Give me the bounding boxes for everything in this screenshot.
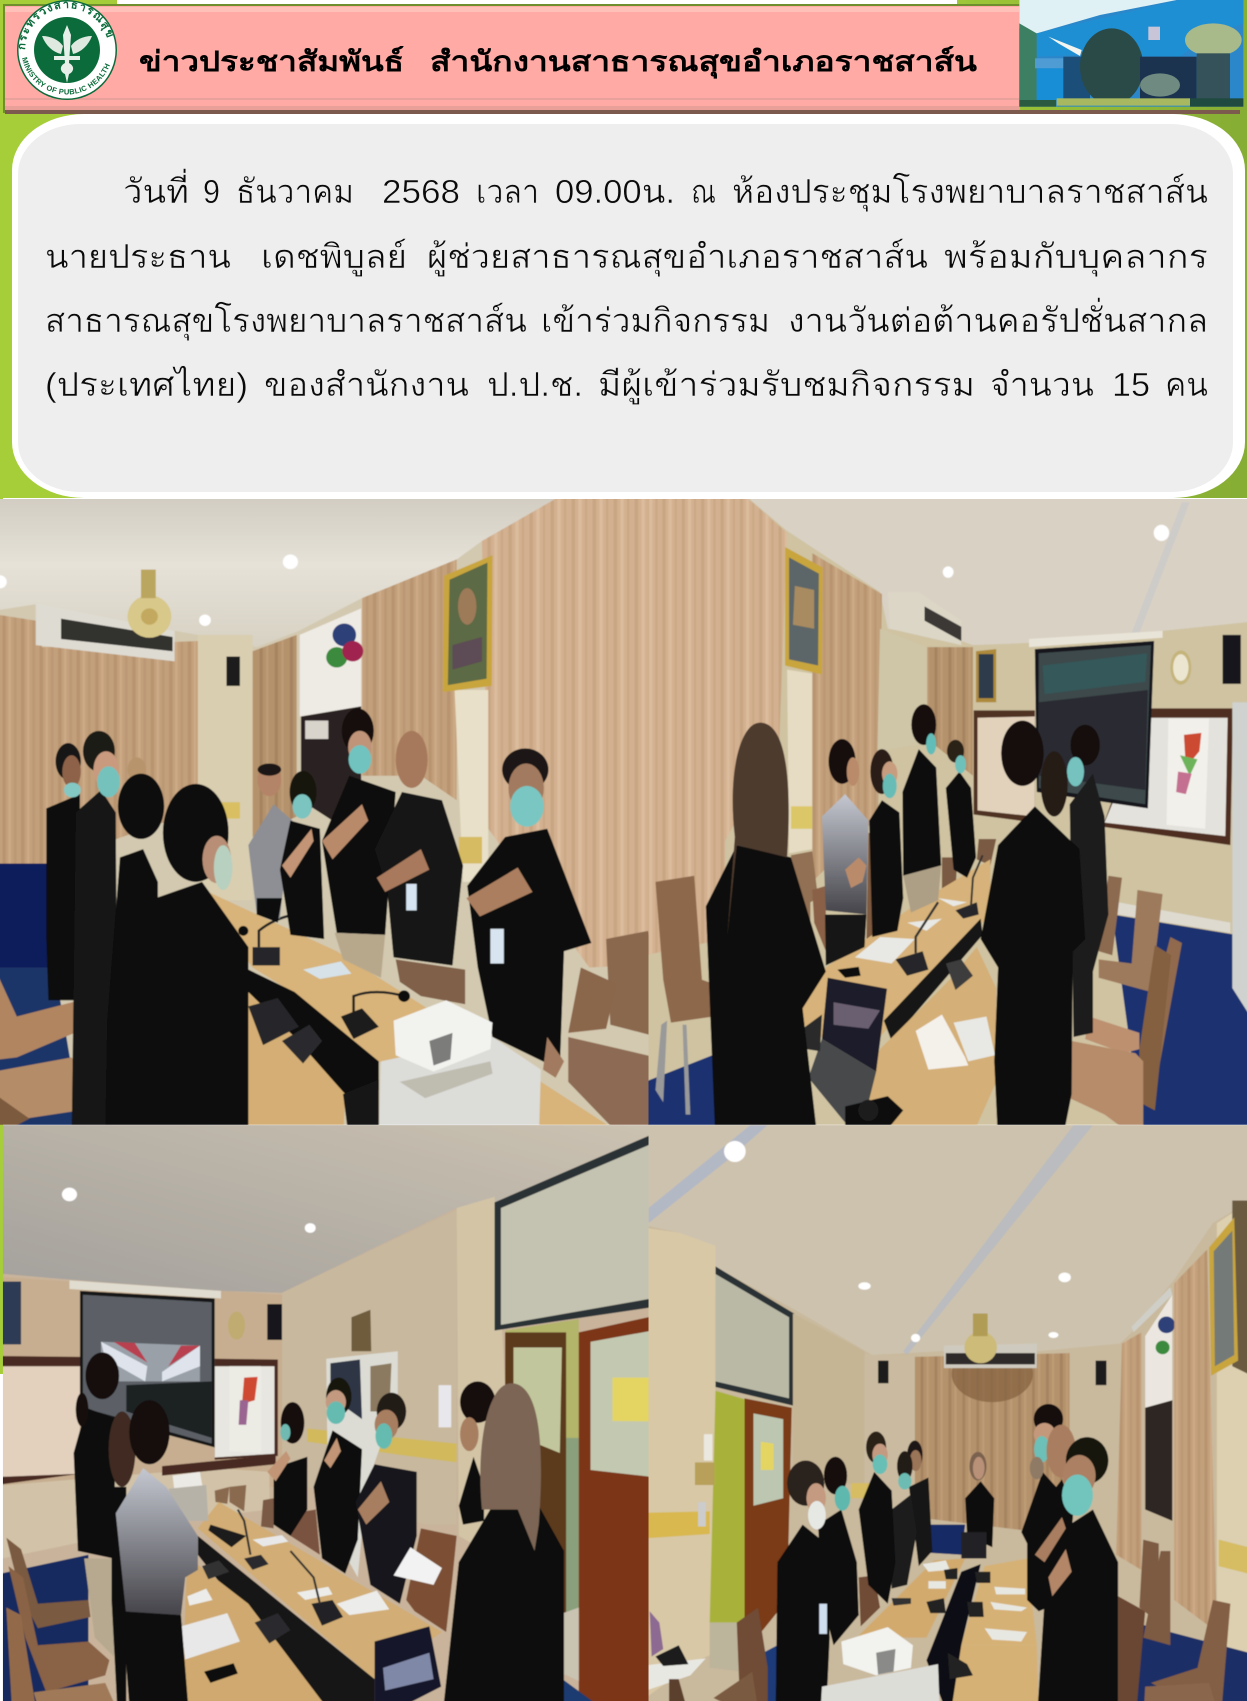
person: woman behind	[109, 1412, 136, 1701]
person: woman in black far	[267, 1402, 307, 1536]
pillar	[625, 1225, 715, 1701]
chairs	[737, 1608, 768, 1701]
chairs left	[6, 1538, 90, 1628]
left chairs	[655, 876, 714, 1023]
floor and blue bench	[930, 1525, 965, 1555]
door area	[710, 1391, 748, 1623]
news text line 4: มีผู้เข้าร่วมรับชมกิจกรรม	[598, 367, 975, 405]
person: woman from back	[105, 774, 164, 1143]
person: woman front	[156, 784, 248, 1143]
projector small	[173, 1472, 203, 1493]
right chairs	[1099, 876, 1122, 955]
window	[495, 1125, 673, 1330]
news text line 4	[45, 365, 1208, 405]
ac unit	[36, 603, 175, 661]
person: man far left	[907, 1441, 932, 1566]
left whiteboard	[0, 1356, 80, 1487]
news text line 1: วันที่	[123, 168, 189, 211]
person: woman far	[965, 1452, 994, 1547]
person: man near door	[459, 1381, 495, 1525]
header title: สำนักงานสาธารณสุขอำเภอราชสาส์น	[430, 46, 977, 79]
laptop far	[961, 1532, 986, 1559]
person: front man with mask	[1037, 1437, 1118, 1701]
person: woman in jacket	[314, 1378, 362, 1574]
table	[209, 892, 608, 1125]
person: man far in black	[946, 740, 976, 878]
boards	[974, 710, 1035, 823]
projector on stand	[342, 1000, 542, 1125]
side table and phone	[625, 1658, 706, 1698]
chairs	[396, 959, 465, 1004]
news text line 1: 2568	[382, 174, 460, 211]
header title	[139, 46, 977, 79]
person: woman back with long hair	[706, 723, 826, 1143]
screen	[69, 1280, 221, 1298]
photo: staff in room, long view	[648, 1125, 1247, 1701]
news text line 2	[45, 238, 1208, 277]
news text line 1: ณ	[691, 174, 716, 211]
far portrait	[976, 649, 996, 702]
photo: staff in room, rear view	[2, 1125, 649, 1701]
person: man far left	[46, 743, 81, 1000]
window	[715, 1266, 794, 1406]
green page background	[0, 0, 1247, 498]
news text line 3: สาธารณสุขโรงพยาบาลราชสาส์น	[45, 301, 527, 341]
icon: ministry of public health logo	[17, 0, 117, 100]
person: man grey shirt	[248, 763, 293, 923]
person: bald man	[375, 731, 463, 966]
walls	[793, 1314, 865, 1487]
person: man in black, back	[74, 1352, 119, 1657]
floor	[0, 1555, 88, 1701]
ac and fan	[944, 1344, 1037, 1368]
person: older man	[892, 1451, 917, 1589]
person: woman with mask	[72, 731, 120, 1143]
table	[198, 1502, 442, 1679]
news text line 2: นายประธาน	[45, 239, 231, 276]
right wall	[282, 1210, 457, 1525]
news text line 3: งานวันต่อต้านคอรัปชั่นสากล	[788, 297, 1208, 340]
portrait	[443, 555, 492, 692]
news text line 2: ผู้ช่วยสาธารณสุขอำเภอราชสาส์น	[427, 238, 928, 277]
photo: staff watching screen, front view	[648, 499, 1247, 1125]
news text line 2: เดชพิบูลย์	[261, 238, 407, 277]
news text line 4: คน	[1165, 367, 1208, 404]
person: man grey shirt, back	[116, 1400, 198, 1701]
doors	[505, 1319, 579, 1619]
person: young man	[322, 708, 396, 978]
news text line 4: (ประเทศไทย)	[45, 365, 248, 404]
person: woman black shirt	[280, 771, 324, 939]
person: bald man right	[1027, 1425, 1076, 1611]
news text line 1: 9	[203, 174, 220, 211]
person: woman with white mask	[775, 1461, 830, 1701]
person: young man right	[1021, 1404, 1063, 1543]
photo: health office building	[1019, 0, 1244, 107]
cabinet	[326, 1351, 398, 1577]
person: woman in jacket	[859, 1432, 895, 1604]
person: man in black back	[981, 721, 1085, 1143]
poster	[300, 608, 361, 717]
map	[229, 1365, 261, 1367]
paper in hand	[394, 1547, 442, 1585]
clock and speaker	[228, 1312, 245, 1340]
news text line 3: เข้าร่วมกิจกรรม	[541, 303, 770, 340]
portrait left	[785, 547, 823, 674]
laptop	[822, 978, 887, 1072]
person: woman with mask 2	[818, 1457, 859, 1645]
person: woman black shirt	[869, 749, 903, 937]
photo: staff standing at table, left view	[0, 499, 649, 1125]
laptop	[375, 1626, 441, 1701]
notebook	[916, 1014, 968, 1070]
poster	[1145, 1295, 1172, 1408]
far chairs	[215, 1487, 229, 1504]
sofa and floor	[0, 863, 48, 972]
map	[1166, 719, 1209, 829]
news text line 4: ป.ป.ช.	[487, 367, 583, 404]
news text line 4: ของสำนักงาน	[264, 367, 469, 404]
news text line 1: เวลา	[476, 174, 539, 211]
icon: ministry of public health logo: กระทรวงสาธารณสุข	[18, 2, 113, 50]
person: woman facing left, masked	[1067, 725, 1108, 1037]
news text line 3	[45, 297, 1208, 341]
header banner	[3, 4, 1240, 114]
person: man grey shirt	[822, 739, 868, 966]
floor	[1112, 914, 1247, 1143]
right wall	[1217, 1193, 1247, 1701]
news text line 1: ธันวาคม	[236, 174, 354, 211]
panel: news text	[12, 114, 1245, 498]
news text line 4: 15	[1112, 367, 1150, 404]
table	[799, 859, 990, 1037]
portrait	[1209, 1217, 1238, 1376]
person: older man with lanyard	[356, 1393, 417, 1604]
person: man right with lanyard	[466, 748, 591, 1078]
projector	[820, 1627, 940, 1701]
icon: ministry of public health logo: MINISTRY OF PUBLIC HEALTH	[22, 57, 110, 94]
person: young man in profile	[902, 704, 941, 912]
clock and speaker	[1170, 650, 1191, 685]
news text line 1: ห้องประชุมโรงพยาบาลราชสาส์น	[732, 172, 1208, 212]
tables	[857, 1559, 965, 1638]
projection screen	[1029, 631, 1163, 647]
person: woman in front with long hair	[442, 1383, 564, 1701]
news text line 2: พร้อมกับบุคลากร	[944, 239, 1208, 277]
news text line 4: จำนวน	[990, 367, 1094, 404]
header title: ข่าวประชาสัมพันธ์	[139, 46, 404, 77]
news text line 1	[123, 168, 1208, 212]
top white strip	[117, 0, 957, 4]
news text line 1: 09.00น.	[555, 174, 675, 211]
